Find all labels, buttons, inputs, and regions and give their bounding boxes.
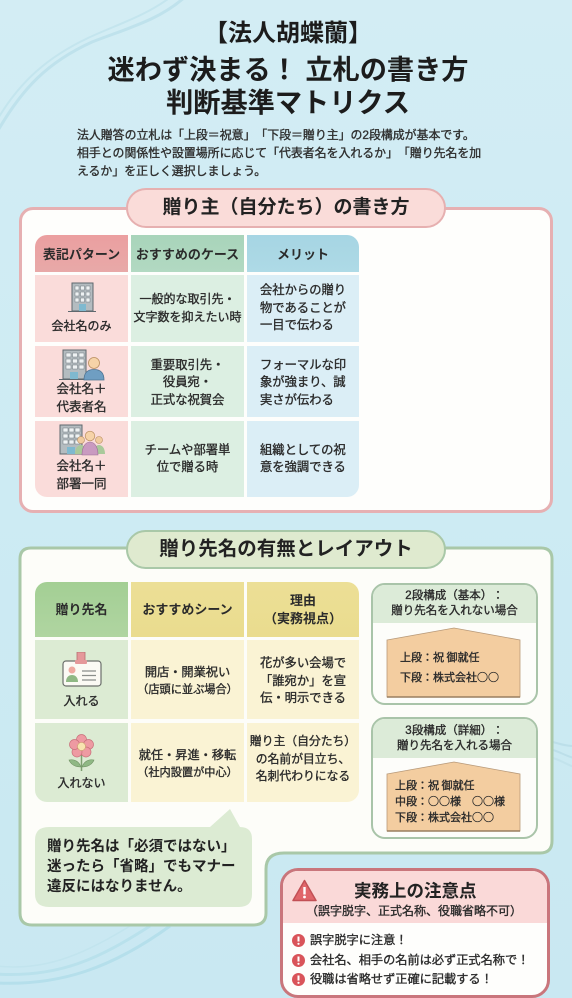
callout text [47, 838, 236, 895]
cell: company only [35, 275, 128, 342]
cell: company only merit [247, 275, 359, 342]
title [108, 20, 468, 118]
card: three-tier layout [371, 717, 538, 839]
cell: representative merit: フォーマルな印 [260, 358, 346, 372]
placard text: 上段：祝 御就任 [400, 649, 479, 665]
cell: department case: チームや部署単 [145, 442, 230, 456]
intro text [77, 128, 481, 178]
heading: sender writing [126, 188, 446, 228]
label: 代表者名 [56, 400, 106, 414]
label: 入れる [63, 694, 100, 708]
cell: department merit: 組織としての祝 [260, 442, 346, 456]
table: recipient decision [35, 582, 359, 802]
placard text: 中段：○○様 ○○様 [395, 793, 505, 809]
item 2 icon [292, 954, 305, 967]
cell: not include reason: 贈り主（自分たち） [250, 734, 356, 748]
cell: company only merit: 物であることが [260, 301, 346, 315]
header: scene: おすすめシーン [142, 602, 233, 616]
label: 入れない [57, 776, 106, 790]
header: merit: メリット [277, 246, 329, 262]
label [56, 382, 106, 414]
placard text [400, 649, 499, 685]
header: case [131, 235, 244, 272]
cell: include reason [247, 640, 359, 719]
card: two-tier layout [371, 583, 538, 705]
header: reason: 理由 [290, 592, 316, 608]
cell: include [35, 640, 128, 719]
main title: 判断基準マトリクス [166, 87, 410, 118]
cell: not include reason: の名前が目立ち、 [256, 752, 350, 766]
cell: department merit [247, 421, 359, 497]
caution header [283, 871, 547, 923]
caution list [292, 933, 529, 986]
caution title: 実務上の注意点 [354, 881, 476, 901]
icon: warning triangle [292, 880, 317, 902]
cell: department case: 位で贈る時 [157, 460, 218, 474]
header: pattern [35, 235, 128, 272]
cell: not include scene: （社内設置が中心） [137, 767, 238, 779]
item 1 icon [292, 934, 305, 947]
title tag line: 【法人胡蝶蘭】 [204, 20, 372, 47]
heading: recipient name: 贈り先名の有無とレイアウト [159, 538, 413, 560]
cell: representative merit: 実さが伝わる [260, 393, 334, 407]
placard text [395, 777, 505, 825]
wooden placard [386, 628, 520, 698]
caution subtitle: （誤字脱字、正式名称、役職省略不可） [306, 904, 522, 918]
callout text: 違反にはなりません。 [47, 879, 192, 895]
header: case: おすすめのケース [136, 246, 239, 262]
cell: not include reason [247, 723, 359, 802]
card heading: 2段構成（基本）： [405, 590, 504, 602]
card heading: 贈り先名を入れない場合 [391, 605, 518, 617]
intro text: 法人贈答の立札は「上段＝祝意」「下段＝贈り主」の2段構成が基本です。 [77, 128, 475, 142]
callout [35, 809, 252, 907]
cell: company + department [35, 421, 128, 497]
card heading [373, 585, 536, 623]
cell: representative case: 正式な祝賀会 [151, 393, 224, 407]
cell: representative case: 重要取引先・ [151, 358, 224, 372]
callout text: 贈り先名は「必須ではない」 [47, 839, 236, 855]
label: 会社名＋ [56, 382, 106, 396]
main title: 迷わず決まる！ 立札の書き方 [108, 54, 468, 85]
header: recipient: 贈り先名 [55, 602, 108, 616]
icon: name badge [62, 652, 102, 687]
icon: building and group [60, 424, 105, 456]
item 3 icon [292, 973, 305, 986]
cell: not include scene: 就任・昇進・移転 [139, 748, 236, 762]
placard text: 下段：株式会社○○ [400, 669, 499, 685]
cell: company only merit: 会社からの贈り [260, 283, 346, 297]
item 1: 誤字脱字に注意！ [310, 933, 408, 947]
card heading: 3段構成（詳細）： [405, 724, 504, 736]
cell: include scene: （店頭に並ぶ場合） [137, 684, 238, 696]
cell: include reason: 伝・明示できる [260, 691, 346, 705]
panel: sender writing [19, 207, 553, 513]
card heading [373, 719, 536, 758]
main title [108, 54, 468, 118]
item 2: 会社名、相手の名前は必ず正式名称で！ [310, 953, 529, 967]
cell: company only case [131, 275, 244, 342]
label: 会社名のみ [51, 319, 112, 333]
callout text: 迷ったら「省略」でもマナー [47, 859, 236, 875]
cell: company only case: 一般的な取引先・ [139, 292, 236, 306]
cell: representative merit [247, 346, 359, 417]
intro text: えるか」を正しく選択しましょう。 [77, 164, 266, 178]
cell: include scene [131, 640, 244, 719]
cell: company + representative [35, 346, 128, 417]
panel: practical cautions [280, 868, 550, 998]
cell: department merit: 意を強調できる [260, 460, 346, 474]
cell: not include scene [131, 723, 244, 802]
cell: company only case: 文字数を抑えたい時 [133, 310, 242, 324]
header: reason [247, 582, 359, 637]
cell: not include reason: 名刺代わりになる [256, 769, 350, 783]
header: reason: （実務視点） [264, 610, 342, 626]
header: merit [247, 235, 359, 272]
table: sender patterns [35, 235, 359, 497]
icon: building and person [59, 350, 104, 380]
heading: recipient name [126, 530, 446, 569]
cell: include reason: 「誰宛か」を宣 [260, 674, 346, 688]
cell: include scene: 開店・開業祝い [145, 664, 230, 678]
cell: representative case [131, 346, 244, 417]
cell: company only merit: 一目で伝わる [260, 318, 334, 332]
cell: department case [131, 421, 244, 497]
label: 会社名＋ [56, 459, 106, 473]
item 3: 役職は省略せず正確に記載する！ [310, 972, 493, 986]
card heading: 贈り先名を入れる場合 [397, 740, 512, 752]
placard text: 下段：株式会社○○ [395, 809, 494, 825]
cell: representative merit: 象が強まり、誠 [260, 375, 346, 389]
placard text: 上段：祝 御就任 [395, 777, 474, 793]
intro text: 相手との関係性や設置場所に応じて「代表者名を入れるか」「贈り先名を加 [77, 146, 481, 160]
header: scene [131, 582, 244, 637]
icon: flower [68, 734, 94, 771]
panel: recipient name [18, 546, 554, 926]
cell: not include [35, 723, 128, 802]
header: pattern: 表記パターン [43, 246, 120, 262]
icon: building [68, 282, 96, 312]
header: recipient [35, 582, 128, 637]
cell: representative case: 役員宛・ [163, 375, 212, 389]
label [56, 459, 106, 490]
heading: sender writing: 贈り主（自分たち）の書き方 [162, 197, 410, 218]
label: 部署一同 [56, 476, 106, 490]
wooden placard [386, 762, 520, 832]
cell: include reason: 花が多い会場で [260, 656, 346, 670]
